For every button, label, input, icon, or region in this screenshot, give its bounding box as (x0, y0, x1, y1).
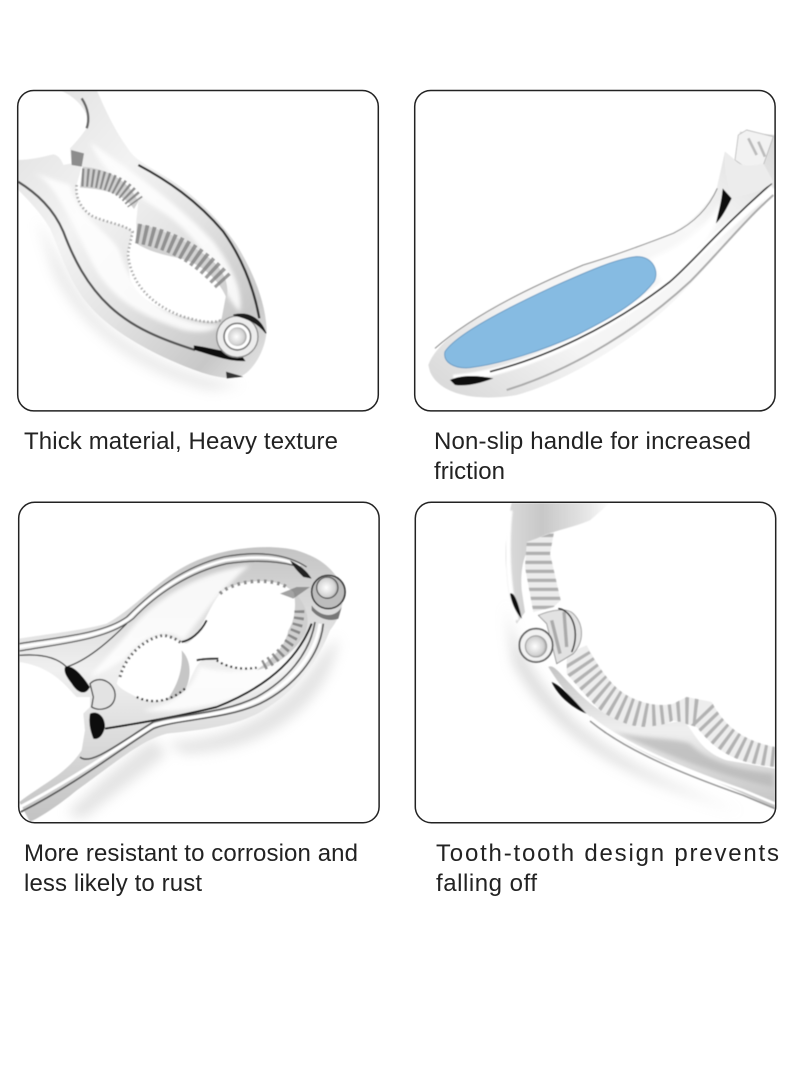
lower rim highlight (590, 717, 775, 804)
pivot pin (217, 314, 266, 357)
handle body (428, 132, 775, 397)
handle highlight (654, 208, 720, 278)
shadow: cracker four (505, 597, 743, 814)
panel: tooth design (415, 502, 776, 823)
shadow: cracker one (46, 242, 225, 391)
lower body (548, 666, 775, 809)
cracker body (19, 547, 344, 822)
hinge shadow (71, 150, 84, 167)
upper teeth ridges (488, 534, 598, 612)
nut opening (117, 581, 306, 701)
teeth right (257, 590, 308, 670)
lower rim highlight (453, 188, 773, 378)
lower polished edge (18, 182, 195, 350)
caption: non-slip handle: Non-slip handle for increased (434, 428, 751, 455)
upper arm reflection (510, 593, 522, 619)
joint head (730, 129, 774, 188)
soft highlight on jaws (30, 142, 241, 332)
upper ring highlight (19, 558, 300, 647)
lower jaw dark line (105, 624, 312, 729)
lower grey rim (507, 195, 773, 390)
dark reflection under pad (490, 183, 772, 372)
caption: corrosion: More resistant to corrosion and (24, 840, 358, 867)
cracker three metal (19, 547, 345, 822)
teeth top serration (220, 581, 287, 594)
teeth lower serration (137, 660, 257, 701)
teeth right ridges (263, 610, 299, 665)
teeth small (167, 650, 190, 700)
handle top edge (435, 188, 717, 348)
upper teeth ridges (82, 177, 135, 202)
panel: non-slip handle (428, 129, 774, 398)
caption: non-slip handle: friction (434, 458, 505, 485)
caption: tooth design: Tooth-tooth design prevents (436, 840, 779, 867)
neck reflection (716, 188, 732, 223)
caption: tooth design: falling off (436, 870, 537, 897)
pivot pin (519, 629, 553, 662)
inner sheen lower (148, 646, 298, 712)
tip mark (226, 372, 243, 378)
cracker one metal (17, 90, 267, 378)
waist dark lines (182, 620, 218, 660)
lower reflection (552, 682, 587, 714)
lower rim line (590, 721, 775, 809)
teeth by pin (280, 587, 310, 599)
panel border: non-slip handle (415, 90, 775, 411)
upper arm (506, 503, 610, 624)
serrated edge (76, 185, 222, 322)
lower ring grooves (21, 622, 323, 812)
panel: thick material (18, 91, 267, 391)
lower body sheen (610, 730, 773, 787)
upper polished edge (138, 165, 259, 318)
lower ring highlight (20, 624, 320, 807)
inner sheen upper (90, 565, 250, 677)
teeth small serration (120, 635, 182, 677)
caption: corrosion: less likely to rust (24, 870, 202, 897)
caption: non-slip handle (434, 428, 751, 485)
panel border: corrosion resistant (19, 502, 379, 823)
upper teeth (525, 532, 561, 612)
upper teeth (80, 167, 138, 209)
small hinge (90, 680, 115, 709)
handle metal (428, 130, 775, 397)
caption: corrosion (24, 840, 358, 897)
lower teeth ridges (137, 233, 223, 282)
lower teeth (136, 223, 227, 298)
barrel hinge (538, 609, 581, 664)
caption: tooth design (436, 840, 779, 897)
top reflection (82, 98, 88, 128)
blue non-slip pad (445, 257, 656, 368)
dark reflection near pin (195, 347, 243, 360)
panel border: tooth design (415, 502, 776, 823)
black reflection left (65, 666, 90, 693)
upper ring grooves (19, 554, 307, 651)
nut opening (76, 167, 227, 322)
panel: corrosion resistant (20, 546, 347, 822)
cracker body (17, 90, 267, 378)
shadow: cracker three (67, 637, 338, 819)
pivot pin (290, 560, 345, 620)
upper arm highlight (508, 510, 517, 620)
lower teeth ridges (573, 660, 775, 757)
caption: thick material: Thick material, Heavy texture (24, 428, 338, 455)
cracker four metal (506, 503, 775, 809)
black reflection lower (89, 713, 105, 739)
left arm dark (19, 624, 127, 667)
lower teeth (567, 645, 775, 767)
panel border: thick material (18, 90, 378, 411)
black reflection on tip (450, 376, 493, 385)
